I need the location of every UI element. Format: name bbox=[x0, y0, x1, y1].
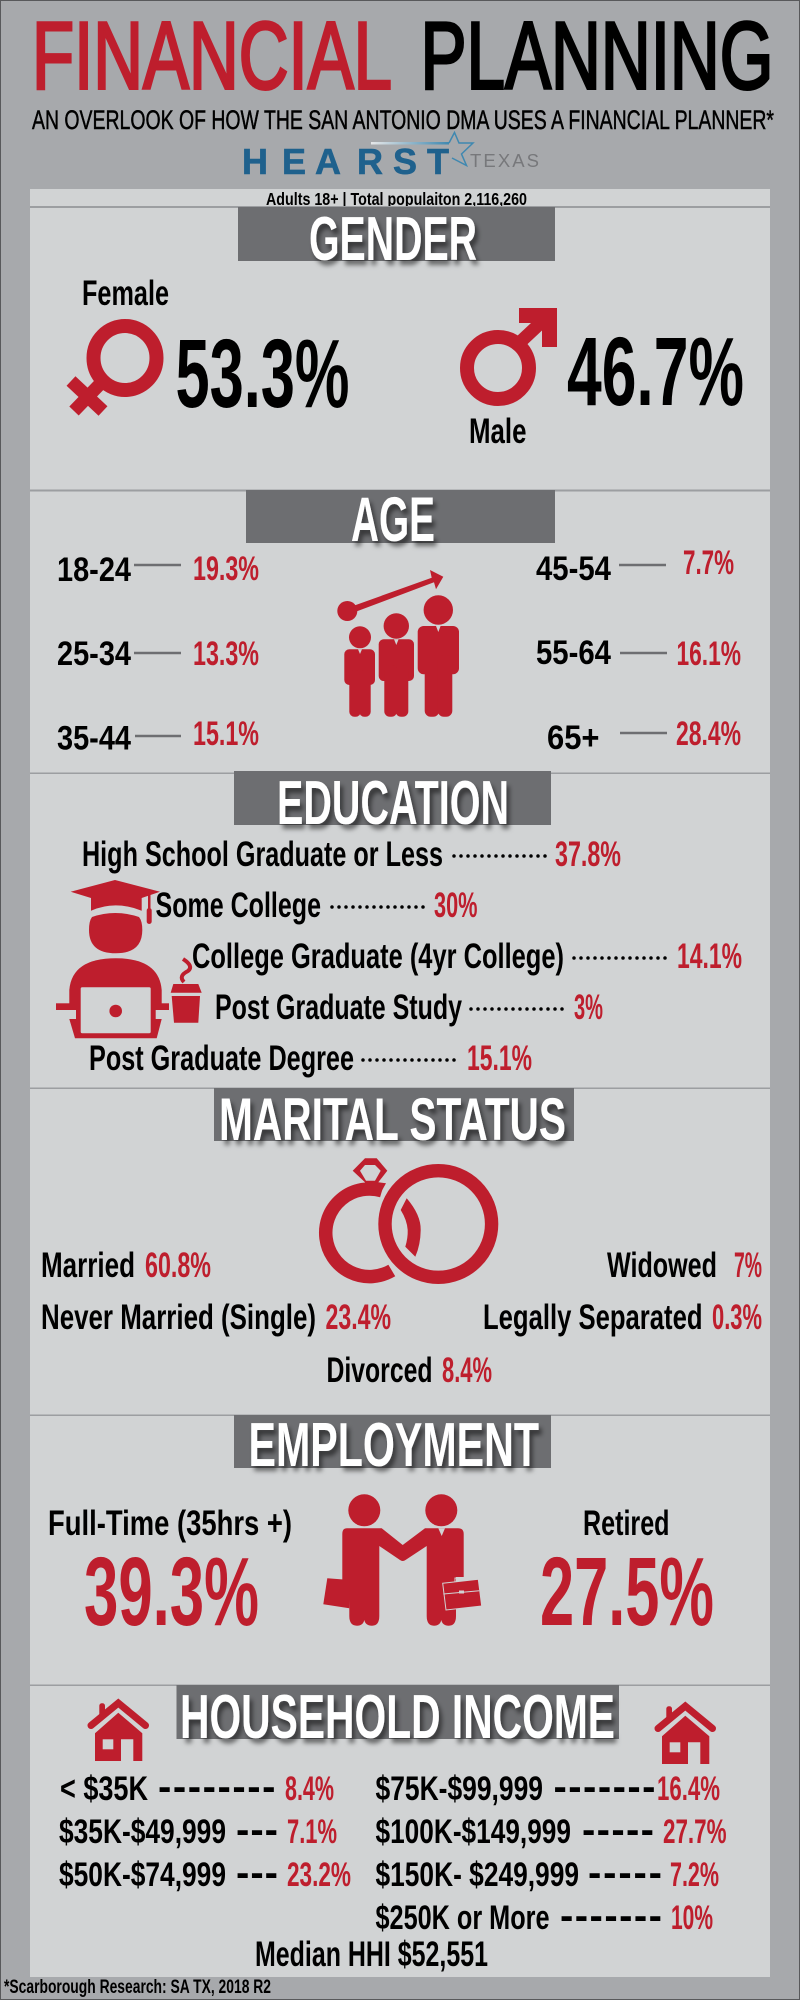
age row 35-44 bbox=[57, 715, 259, 758]
logo: Hearst Texas: TEXAS bbox=[470, 150, 539, 171]
marital row: married: Married bbox=[41, 1246, 135, 1285]
education row: some college: 30% bbox=[434, 886, 478, 925]
age row 18-24: 19.3% bbox=[193, 550, 259, 588]
retired stat bbox=[540, 1504, 714, 1646]
income row: 75K-99,999: 16.4% bbox=[657, 1770, 720, 1808]
age row 45-54: 7.7% bbox=[683, 544, 734, 582]
income row: 75K-99,999: $75K-$99,999 bbox=[376, 1770, 543, 1808]
education row: post graduate study: Post Graduate Study bbox=[215, 988, 462, 1027]
panel: age bbox=[30, 485, 770, 773]
heading: gender: GENDER bbox=[309, 205, 477, 274]
full-time stat: Full-Time (35hrs +) bbox=[48, 1504, 292, 1543]
education row: post graduate degree: 15.1% bbox=[467, 1039, 532, 1078]
marital row: divorced: Divorced bbox=[326, 1351, 432, 1390]
retired stat: Retired bbox=[583, 1504, 670, 1543]
panel: audience base: Adults 18+ | Total populaiton 2,116,260 bbox=[266, 189, 527, 209]
age row 45-54 bbox=[536, 544, 734, 588]
full-time stat bbox=[48, 1504, 292, 1646]
icon: house right bbox=[658, 1706, 712, 1764]
age row 25-34 bbox=[57, 635, 259, 673]
income row: 250K or more: $250K or More bbox=[376, 1899, 550, 1937]
income row: 50K-74,999: 23.2% bbox=[287, 1856, 351, 1894]
male stat bbox=[467, 308, 744, 451]
icon: handshake with briefcases bbox=[323, 1494, 482, 1626]
age row 25-34: 13.3% bbox=[193, 635, 259, 673]
panel: gender bbox=[30, 205, 770, 490]
income row: 150K-249,999: ----- bbox=[588, 1851, 662, 1895]
age row 65+: 65+ bbox=[547, 719, 600, 757]
marital row: legally separated: 0.3% bbox=[712, 1298, 762, 1337]
education row: college graduate: College Graduate (4yr College) bbox=[192, 937, 564, 976]
income row: 35K-49,999: 7.1% bbox=[287, 1813, 337, 1851]
marital row: never married: Never Married (Single) bbox=[41, 1298, 316, 1337]
income row: under 35K bbox=[60, 1765, 334, 1809]
age row 25-34: 25-34 bbox=[57, 635, 131, 673]
icon: wedding rings bbox=[326, 1158, 492, 1277]
income row: 100K-149,999: ----- bbox=[582, 1808, 654, 1852]
income row: 35K-49,999: --- bbox=[236, 1808, 278, 1852]
income row: 150K-249,999: 7.2% bbox=[670, 1856, 719, 1894]
income row: 50K-74,999: --- bbox=[236, 1851, 278, 1895]
income row: 150K-249,999 bbox=[376, 1851, 719, 1895]
logo: Hearst Texas: HEARST bbox=[242, 141, 449, 182]
marital row: widowed: Widowed bbox=[607, 1246, 717, 1285]
icon: male symbol bbox=[467, 308, 557, 399]
title bbox=[32, 2, 774, 110]
panel: marital status bbox=[30, 1086, 770, 1415]
age row 18-24 bbox=[57, 550, 259, 589]
marital row: never married: 23.4% bbox=[326, 1298, 391, 1337]
title: FINANCIAL bbox=[32, 2, 392, 110]
income row: 35K-49,999: $35K-$49,999 bbox=[59, 1813, 226, 1851]
age row 18-24: 18-24 bbox=[57, 551, 131, 589]
age row 65+: 28.4% bbox=[676, 715, 741, 753]
female stat bbox=[71, 274, 350, 428]
heading: employment: EMPLOYMENT bbox=[248, 1411, 539, 1480]
income row: 75K-99,999 bbox=[376, 1765, 720, 1809]
icon: growing people with arrow bbox=[337, 570, 459, 717]
panel: household income bbox=[30, 1683, 770, 1977]
median household income: Median HHI $52,551 bbox=[255, 1935, 488, 1974]
age row 45-54: 45-54 bbox=[536, 550, 611, 588]
marital row: married: 60.8% bbox=[145, 1246, 211, 1285]
full-time stat: 39.3% bbox=[84, 1537, 259, 1646]
heading: age: AGE bbox=[351, 485, 435, 555]
panel: audience base bbox=[30, 189, 770, 209]
age row 55-64: 16.1% bbox=[676, 635, 741, 673]
marital row: widowed: 7% bbox=[734, 1246, 762, 1285]
heading: marital status bbox=[214, 1086, 574, 1153]
heading: employment bbox=[234, 1411, 551, 1480]
income row: under 35K: < $35K bbox=[60, 1770, 148, 1808]
income row: 100K-149,999: 27.7% bbox=[663, 1813, 726, 1851]
education row: college graduate: 14.1% bbox=[677, 937, 742, 976]
panel: employment bbox=[30, 1411, 770, 1685]
education row: some college: Some College bbox=[156, 886, 321, 925]
age row 35-44: 35-44 bbox=[57, 720, 131, 758]
age row 35-44: 15.1% bbox=[193, 715, 259, 753]
income row: 100K-149,999: $100K-$149,999 bbox=[376, 1813, 571, 1851]
age row 65+ bbox=[547, 715, 741, 757]
income row: 75K-99,999: ------- bbox=[554, 1765, 656, 1809]
heading: education: EDUCATION bbox=[277, 769, 509, 838]
age row 55-64 bbox=[536, 634, 741, 673]
income row: 100K-149,999 bbox=[376, 1808, 726, 1852]
female stat: Female bbox=[82, 274, 169, 313]
income row: under 35K: -------- bbox=[158, 1765, 276, 1809]
education row: high school: 37.8% bbox=[555, 835, 621, 874]
income row: 50K-74,999 bbox=[59, 1851, 351, 1895]
logo: Hearst Texas bbox=[242, 132, 539, 182]
age row 55-64: 55-64 bbox=[536, 634, 611, 672]
income row: 250K or more: ------- bbox=[560, 1894, 662, 1938]
female stat: 53.3% bbox=[176, 319, 350, 428]
source footnote: *Scarborough Research: SA TX, 2018 R2 bbox=[4, 1977, 271, 1998]
heading: education bbox=[234, 769, 551, 838]
icon: house left bbox=[91, 1703, 146, 1761]
male stat: Male bbox=[469, 412, 526, 451]
icon: graduate with laptop and coffee bbox=[56, 880, 202, 1038]
education row: post graduate study: 3% bbox=[574, 988, 603, 1027]
marital row: legally separated: Legally Separated bbox=[483, 1298, 702, 1337]
marital row: divorced: 8.4% bbox=[442, 1351, 492, 1390]
panel: education bbox=[30, 769, 770, 1088]
income row: 35K-49,999 bbox=[59, 1808, 337, 1852]
income row: 250K or more: 10% bbox=[671, 1899, 713, 1937]
icon: female symbol bbox=[71, 326, 156, 411]
income row: 50K-74,999: $50K-$74,999 bbox=[59, 1856, 226, 1894]
income row: under 35K: 8.4% bbox=[285, 1770, 334, 1808]
education row: post graduate degree: Post Graduate Degree bbox=[89, 1039, 354, 1078]
education row: high school: High School Graduate or Less bbox=[82, 835, 443, 874]
heading: marital status: MARITAL STATUS bbox=[219, 1086, 566, 1153]
income row: 250K or more bbox=[376, 1894, 713, 1938]
income row: 150K-249,999: $150K- $249,999 bbox=[376, 1856, 579, 1894]
heading: age bbox=[246, 485, 555, 555]
